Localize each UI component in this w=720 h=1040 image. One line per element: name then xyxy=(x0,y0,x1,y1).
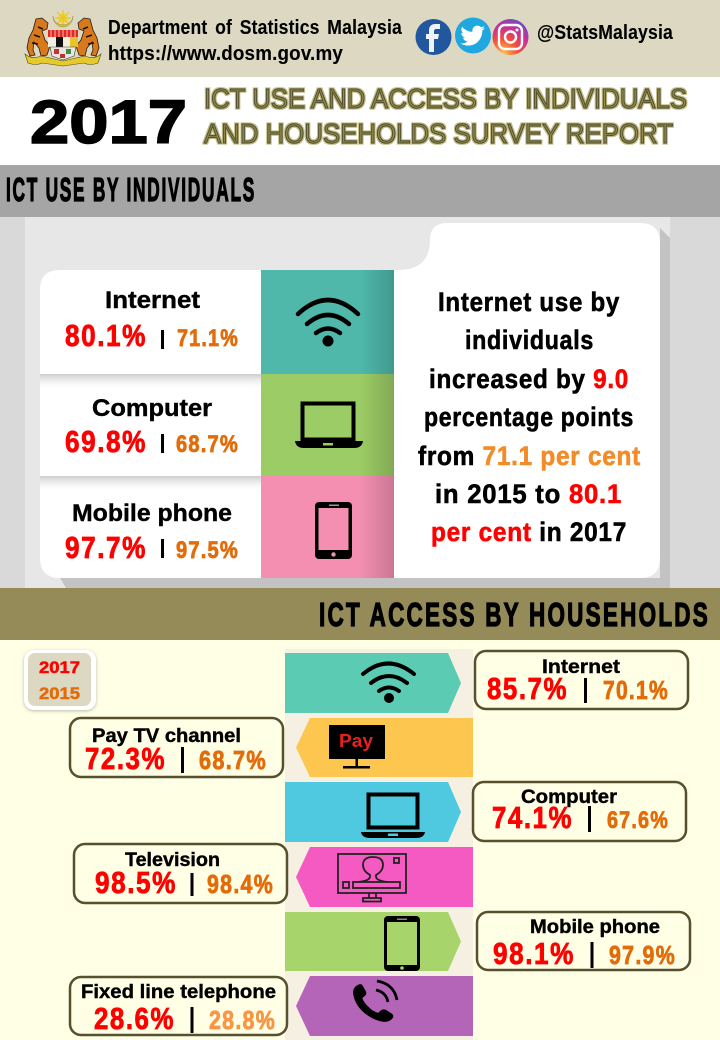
text: internet use summary: percentage points xyxy=(424,402,634,432)
text: internet use summary: from 71.1 per cent xyxy=(418,441,641,471)
values: internet: 71.1% xyxy=(177,325,239,352)
text: website: https://www.dosm.gov.my xyxy=(108,43,344,65)
card: mobile phone: 98.1% xyxy=(493,936,575,971)
band: computer xyxy=(285,782,461,842)
text: internet label: Internet xyxy=(105,287,200,314)
heading band: ICT access by households xyxy=(0,588,720,640)
card: pay TV: 68.7% xyxy=(199,745,267,775)
icon: television xyxy=(338,854,406,902)
icon: wifi xyxy=(298,300,358,346)
title band xyxy=(0,77,720,165)
values: internet xyxy=(65,318,239,353)
legend: 2017 xyxy=(39,659,80,677)
legend xyxy=(24,650,96,710)
icon: phone xyxy=(384,916,420,971)
panel: ICT access by households xyxy=(0,640,720,1040)
icon: Malaysia coat of arms xyxy=(25,10,101,66)
icon: pay TV screen xyxy=(329,725,385,768)
icon: pay TV screen: Pay xyxy=(339,731,373,751)
band: pay TV xyxy=(296,718,473,777)
card: internet: Internet xyxy=(542,657,621,678)
white card xyxy=(40,223,660,578)
card: pay TV xyxy=(70,718,283,777)
text: computer label: Computer xyxy=(92,395,212,422)
text: report title line 1: ICT USE AND ACCESS BY INDIVIDUALS xyxy=(204,83,687,114)
text: internet use summary: in 2015 to 80.1 xyxy=(435,479,622,509)
text: mobile phone label: Mobile phone xyxy=(72,500,232,527)
card: television: 98.5% xyxy=(95,865,177,900)
card: computer: 67.6% xyxy=(607,807,669,834)
icon: telephone xyxy=(353,981,397,1022)
text: internet use summary xyxy=(418,287,641,547)
values: computer: 68.7% xyxy=(176,431,239,458)
card: pay TV: 72.3% xyxy=(85,741,166,776)
heading band: ICT use by individuals: ICT USE BY INDIVIDUALS xyxy=(6,171,256,208)
card: internet: 85.7% xyxy=(487,671,568,706)
text: department name: Department of Statistics Malaysia xyxy=(108,17,403,39)
card: internet: 70.1% xyxy=(603,675,669,705)
row shadows xyxy=(40,374,261,390)
icon: twitter xyxy=(455,18,491,54)
text: internet use summary: Internet use by xyxy=(438,287,620,317)
icon: facebook xyxy=(416,19,452,55)
row: mobile phone xyxy=(65,476,394,578)
card: television: Television xyxy=(125,850,220,871)
band: mobile phone xyxy=(285,912,461,971)
card: fixed line telephone: 28.6% xyxy=(94,1001,175,1036)
card: television xyxy=(74,844,287,903)
row: computer xyxy=(65,374,394,476)
card: computer: Computer xyxy=(521,787,618,808)
text: internet use summary: increased by 9.0 xyxy=(429,364,629,394)
values: computer xyxy=(65,424,239,459)
card: pay TV: Pay TV channel xyxy=(92,726,241,747)
card: computer: 74.1% xyxy=(492,800,573,835)
band: internet xyxy=(285,653,461,713)
legend: 2015 xyxy=(39,685,80,703)
band: fixed line telephone xyxy=(296,976,473,1036)
card: mobile phone: Mobile phone xyxy=(530,917,660,938)
text: report title line 2: AND HOUSEHOLDS SURVEY REPORT xyxy=(204,118,673,149)
card: television: 98.4% xyxy=(207,869,274,899)
values: mobile phone: 97.7% xyxy=(65,530,147,565)
values: mobile phone: 97.5% xyxy=(176,537,239,564)
icon: laptop xyxy=(361,794,425,838)
text: year: 2017 xyxy=(30,88,187,156)
row: internet xyxy=(65,270,394,374)
text: social handle: @StatsMalaysia xyxy=(537,22,674,44)
icon: wifi xyxy=(363,664,414,703)
values: computer: 69.8% xyxy=(65,424,147,459)
icon: laptop xyxy=(295,404,363,448)
text: internet use summary: individuals xyxy=(465,325,594,355)
panel: ICT use by individuals xyxy=(0,217,720,588)
card: internet xyxy=(475,651,688,709)
card: fixed line telephone: 28.8% xyxy=(209,1005,276,1035)
header band xyxy=(0,0,720,77)
icon: instagram xyxy=(492,19,528,55)
heading band: ICT use by individuals xyxy=(0,165,720,217)
text: internet use summary: per cent in 2017 xyxy=(431,517,627,547)
card: fixed line telephone: Fixed line telephone xyxy=(81,982,276,1003)
card: mobile phone xyxy=(477,912,690,971)
band: television xyxy=(296,847,473,907)
card: computer xyxy=(473,782,686,841)
card: mobile phone: 97.9% xyxy=(609,940,676,970)
icon: phone xyxy=(315,502,352,559)
values: internet: 80.1% xyxy=(65,318,147,353)
values: mobile phone xyxy=(65,530,239,565)
card: fixed line telephone xyxy=(70,977,287,1036)
